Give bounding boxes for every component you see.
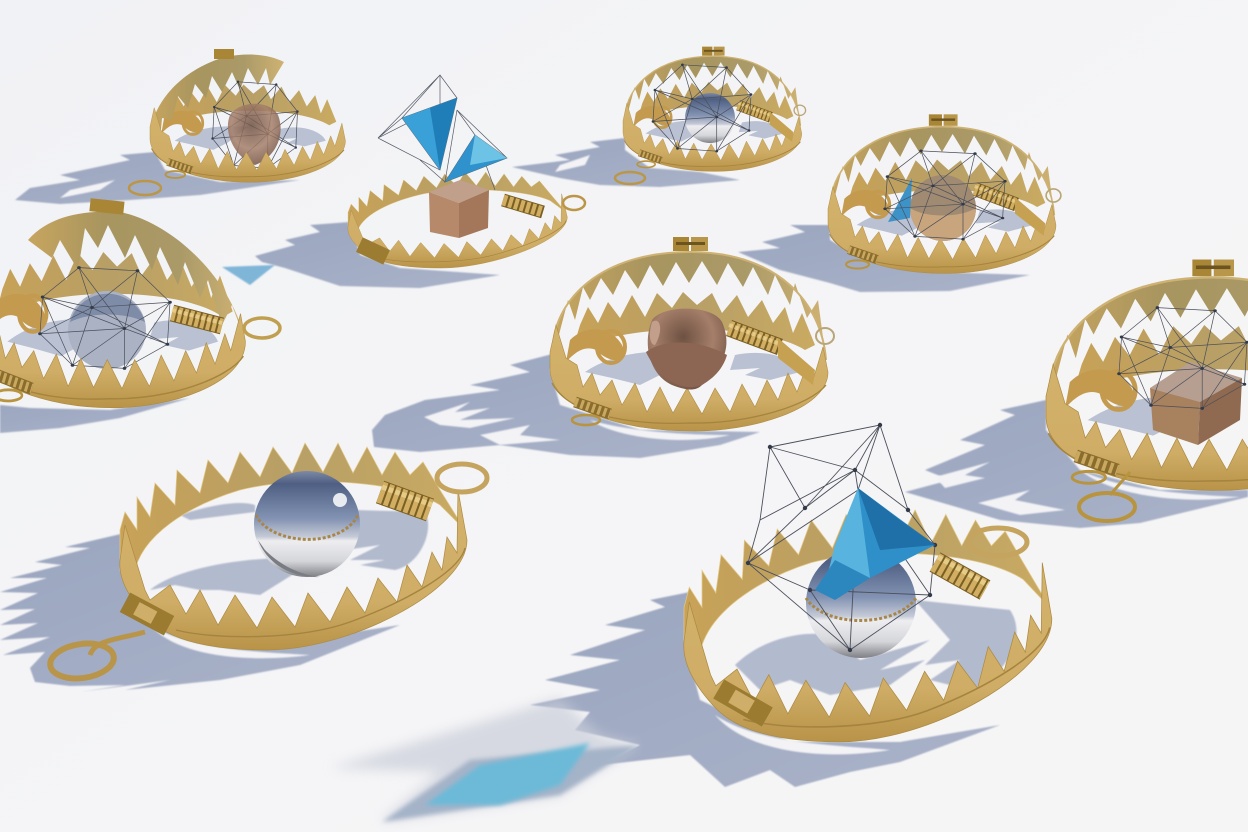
rock xyxy=(646,309,727,390)
wireframe xyxy=(378,75,507,190)
trap ring front xyxy=(348,194,567,268)
cube xyxy=(1150,362,1242,445)
hook and ring xyxy=(48,632,145,682)
shadow: top-left trap xyxy=(15,152,300,204)
hook ring xyxy=(129,181,161,195)
handle ring xyxy=(437,464,487,492)
trap base back xyxy=(0,252,233,356)
handle ring xyxy=(244,318,280,338)
handle ring xyxy=(969,528,1027,556)
trap base front xyxy=(0,289,245,408)
cube xyxy=(429,180,489,238)
trap: center with rock xyxy=(550,237,834,431)
blue prism lower xyxy=(445,135,507,182)
sphere xyxy=(685,93,735,143)
shadow: right trap xyxy=(905,400,1248,528)
shadow: bottom-left trap xyxy=(0,533,400,692)
trap: bottom-right with chrome sphere and blue prism xyxy=(684,423,1052,742)
caustic: small blue patch by left trap xyxy=(222,265,275,285)
hook ring xyxy=(1079,472,1135,521)
trap: right with cube xyxy=(1046,260,1248,521)
rock xyxy=(228,104,281,165)
lit streaks inside shadows xyxy=(60,155,1240,754)
shadow: upper-right trap xyxy=(738,225,1030,292)
trap: mid-top with blue prisms xyxy=(348,75,585,268)
shadow: bottom-right trap xyxy=(530,592,1000,787)
trap jaw xyxy=(150,49,284,140)
small blue prism xyxy=(888,178,912,222)
hook ring xyxy=(615,172,645,184)
spring xyxy=(935,557,988,590)
chrome sphere xyxy=(806,548,916,658)
blue prism xyxy=(815,488,935,600)
trap: bottom-left with chrome sphere xyxy=(48,443,487,682)
hinge xyxy=(356,237,390,265)
trap ring front xyxy=(684,563,1052,742)
cast shadows layer xyxy=(0,138,1248,787)
trap: top-left with open jaw xyxy=(129,49,345,195)
shadow: mid-top trap xyxy=(255,222,500,288)
wireframe xyxy=(746,423,937,652)
trap: upper-right xyxy=(828,114,1061,273)
trap body xyxy=(828,114,1061,273)
trap base front xyxy=(150,108,345,182)
trap ring back xyxy=(684,510,1050,658)
shadow: top-center trap xyxy=(512,138,740,187)
shadow: left trap xyxy=(0,398,190,433)
trap ring front xyxy=(120,490,467,650)
spring xyxy=(172,310,222,326)
floor shadow inside ring xyxy=(735,600,1016,695)
chrome sphere xyxy=(254,471,360,577)
spring xyxy=(380,487,432,510)
sphere xyxy=(68,291,146,369)
caustic: blue light patch xyxy=(330,698,640,822)
trap: top-center xyxy=(615,47,806,184)
trap body xyxy=(623,47,806,171)
trap ring back xyxy=(348,172,566,233)
wireframe xyxy=(652,64,752,152)
trap ring back xyxy=(120,443,465,575)
wireframe xyxy=(38,266,172,370)
trap: left with tilted jaw xyxy=(0,198,280,408)
trap base back xyxy=(161,85,336,150)
wireframe xyxy=(211,81,299,169)
sphere xyxy=(910,175,976,241)
hinge xyxy=(120,593,174,635)
blue prism upper xyxy=(402,98,457,170)
floor shadow inside ring xyxy=(150,503,428,595)
hinge xyxy=(713,679,773,727)
wireframe xyxy=(1117,306,1248,410)
wireframe xyxy=(883,150,1007,240)
trap body xyxy=(1046,260,1248,490)
shadow: center trap xyxy=(372,352,760,458)
trap body xyxy=(550,237,834,431)
trap jaw xyxy=(28,198,245,340)
spring xyxy=(503,196,585,212)
